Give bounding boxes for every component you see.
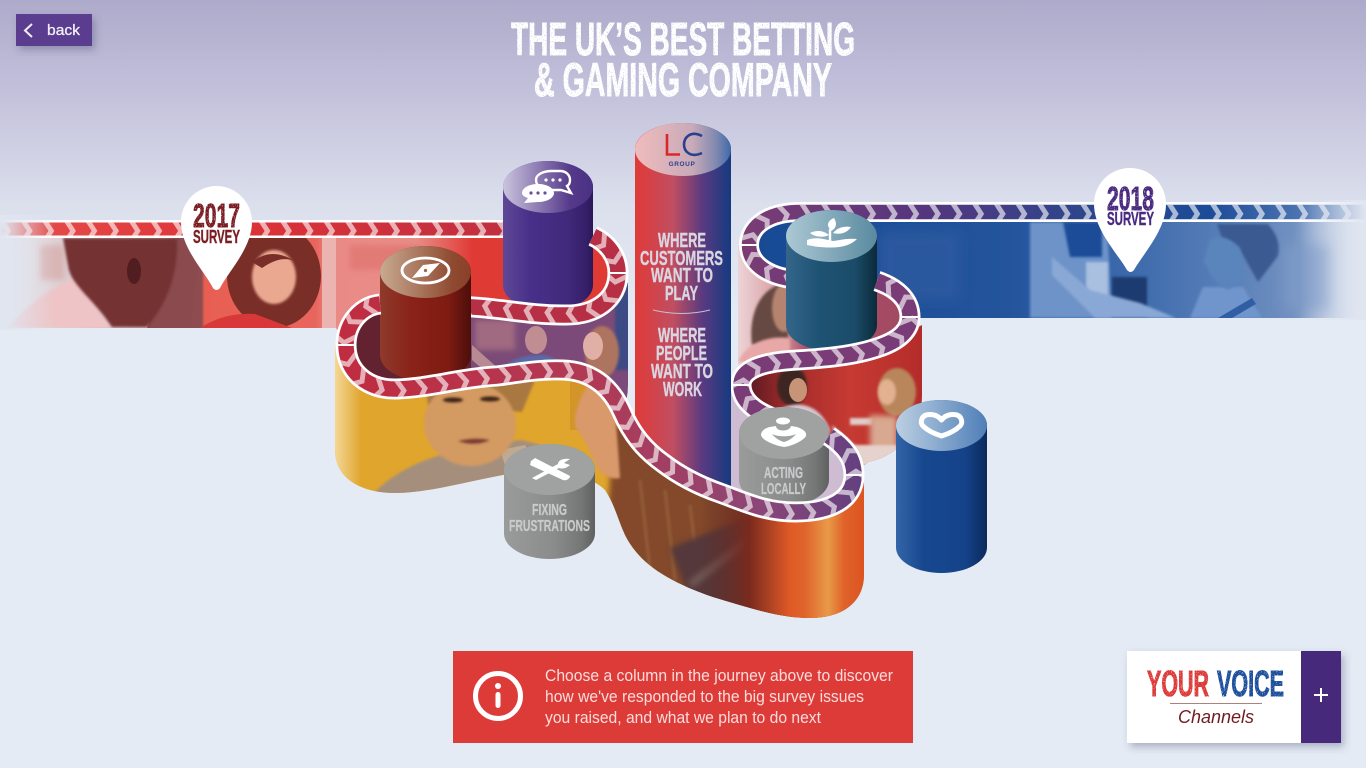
- panel: your voice channels: YOUR: [1147, 663, 1209, 704]
- panel: your voice channels: [1127, 651, 1341, 743]
- column: central LC Group: [635, 123, 731, 497]
- panel: your voice channels: Channels: [1178, 707, 1254, 727]
- title: [511, 13, 855, 106]
- callout: instructions: how we've responded to the big survey issues: [545, 688, 864, 706]
- text: where customers want to play: PLAY: [665, 283, 698, 305]
- text: where people want to work: [651, 325, 713, 401]
- photo: colleagues in loop: [356, 282, 628, 398]
- callout: instructions: [453, 651, 913, 743]
- callout: instructions: Choose a column in the journey above to discover: [545, 667, 893, 685]
- ribbon: upper loop: [471, 226, 628, 326]
- pin: 2017 survey: 2017: [193, 197, 240, 234]
- back button: back: [47, 22, 81, 39]
- photo band: 2017 survey staff: [11, 238, 608, 330]
- text: where customers want to play: [640, 230, 723, 305]
- column: blue, heart icon: [896, 400, 987, 573]
- column: grey, fixing frustrations: FRUSTRATIONS: [509, 518, 590, 535]
- callout: instructions: you raised, and what we plan to do next: [545, 709, 821, 727]
- icon: people and heart: [761, 418, 806, 447]
- title: & GAMING COMPANY: [534, 53, 832, 106]
- text: where customers want to play: WHERE: [658, 230, 706, 252]
- pin: 2018 survey: 2018: [1107, 180, 1154, 217]
- column: teal, plant icon: [786, 210, 877, 351]
- photo: yellow room with colleagues, fading to orange: [330, 340, 870, 625]
- back button: [16, 14, 92, 46]
- column: grey, acting locally: ACTING: [764, 465, 803, 482]
- column: grey, acting locally: [739, 407, 829, 506]
- ribbon tick: upper right loop: [740, 244, 759, 246]
- text: where people want to work: WHERE: [658, 325, 706, 347]
- ribbon: 2018 approach: [739, 202, 1361, 288]
- pin: 2017 survey: [181, 186, 252, 290]
- text: where people want to work: WORK: [663, 379, 702, 401]
- ribbon: main sweep: [336, 294, 864, 522]
- photo band: 2018 survey staff: [759, 222, 1348, 318]
- photo: woman and maroon panel: [738, 245, 900, 366]
- icon: information: [476, 674, 520, 718]
- panel: your voice channels: VOICE: [1217, 663, 1284, 704]
- column: dark red, compass icon: [380, 246, 471, 381]
- column: grey, fixing frustrations: [504, 444, 595, 559]
- column: purple, chat icon: [503, 161, 593, 311]
- text: where people want to work: WANT TO: [651, 361, 713, 383]
- icon: LC logo: GROUP: [669, 161, 695, 168]
- column: grey, acting locally: LOCALLY: [761, 481, 806, 498]
- pin: 2018 survey: SURVEY: [1107, 209, 1154, 229]
- pin: 2018 survey: [1094, 168, 1166, 272]
- ribbon: right loop: [731, 271, 920, 417]
- photo: pale lavender panel behind acting locally: [720, 385, 854, 512]
- title: THE UK’S BEST BETTING: [511, 13, 855, 65]
- icon: crossed tools: [530, 458, 570, 480]
- edge fades on the ribbon bands: [0, 200, 1366, 330]
- icon: LC logo: [667, 134, 702, 168]
- text: where customers want to play: WANT TO: [651, 265, 713, 287]
- column: grey, fixing frustrations: FIXING: [532, 502, 567, 519]
- pin: 2017 survey: SURVEY: [193, 227, 240, 247]
- photo: meeting on red wall: [752, 325, 922, 466]
- text: where people want to work: PEOPLE: [656, 343, 707, 365]
- text: where customers want to play: CUSTOMERS: [640, 248, 723, 270]
